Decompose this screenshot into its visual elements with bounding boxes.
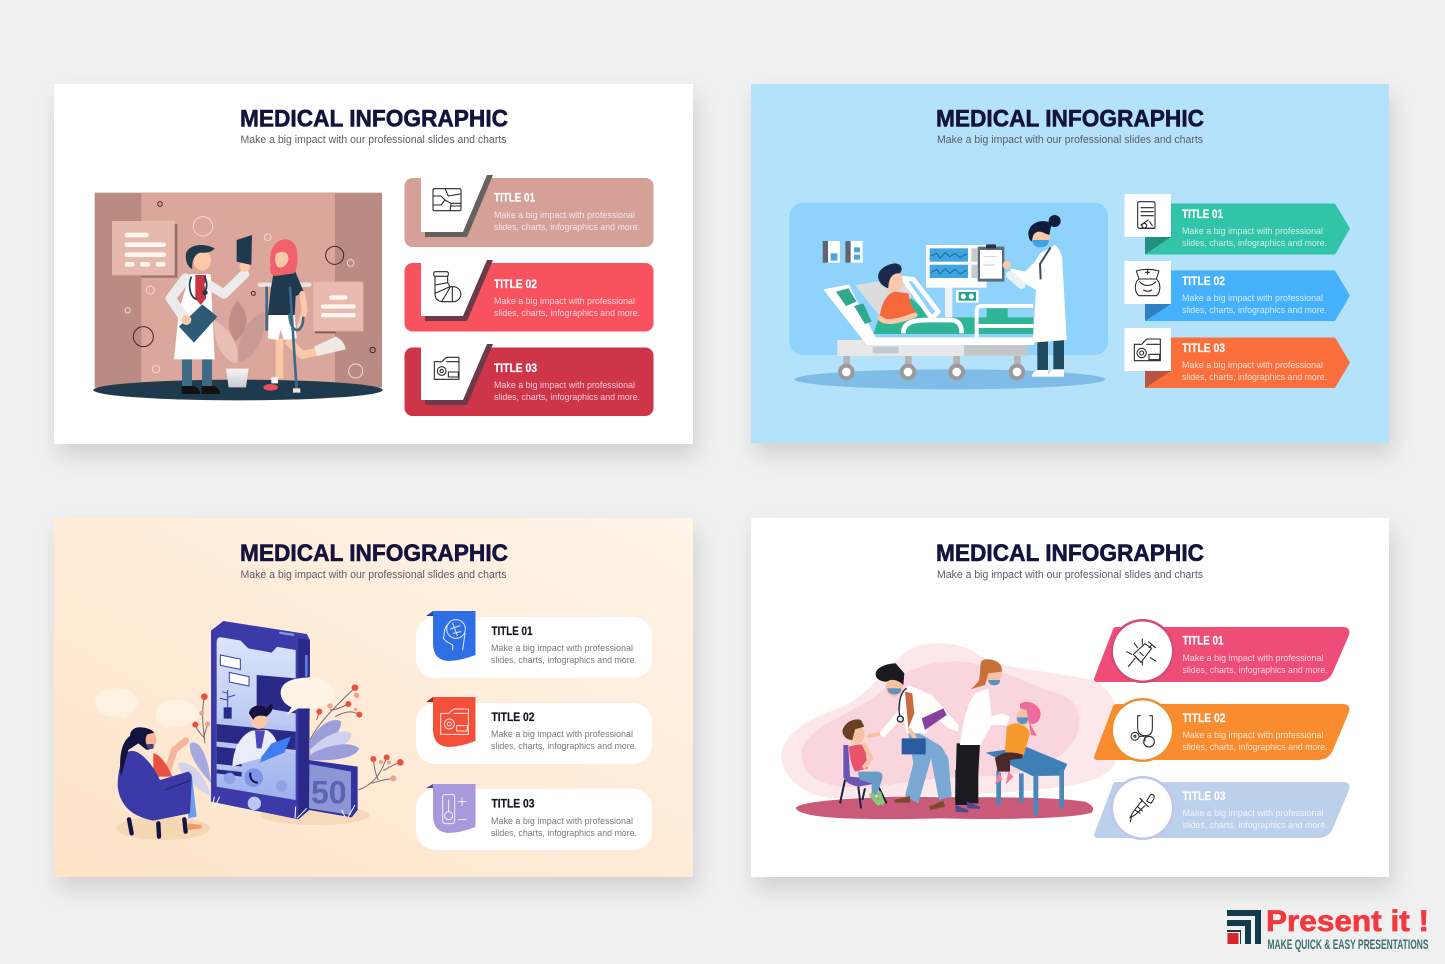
icon: x-ray map xyxy=(433,189,461,211)
card text xyxy=(1182,711,1328,753)
card text: TITLE 01 xyxy=(494,190,535,204)
icon ribbon: x-ray folder xyxy=(426,697,476,747)
card text: Make a big impact with professional xyxy=(1182,808,1324,819)
card: title 01 xyxy=(1094,619,1349,683)
icon: syringe xyxy=(1127,639,1156,667)
card: title 01 xyxy=(404,175,654,247)
illustration: patient in hospital bed with doctor xyxy=(789,203,1108,389)
icon: x-ray folder xyxy=(1134,339,1160,361)
card text: slides, charts, infographics and more. xyxy=(491,655,637,666)
card text: TITLE 02 xyxy=(1182,274,1225,288)
title: MEDICAL INFOGRAPHIC xyxy=(936,106,1204,132)
card text: slides, charts, infographics and more. xyxy=(1182,305,1327,316)
card text: Make a big impact with professional xyxy=(1182,293,1323,304)
icon ribbon: brain xyxy=(426,611,476,661)
panel: top-right slide xyxy=(751,84,1389,443)
card text xyxy=(491,710,637,752)
card text: TITLE 01 xyxy=(492,624,533,638)
panel: bottom-left slide xyxy=(54,518,693,877)
card: title 02 xyxy=(416,697,652,764)
icon: arm cast xyxy=(434,272,461,302)
icon: logo mark xyxy=(1227,910,1261,944)
card: title 03 xyxy=(1124,328,1350,388)
card text: Make a big impact with professional xyxy=(494,210,635,221)
card: title 01 xyxy=(1124,194,1350,254)
logo: Present it xyxy=(1227,905,1429,952)
illustration: telemedicine phone consultation: 50 xyxy=(311,774,347,810)
card text: slides, charts, infographics and more. xyxy=(491,828,637,839)
panel: bottom-right slide xyxy=(751,518,1389,877)
card text: TITLE 01 xyxy=(1182,207,1223,221)
card text: slides, charts, infographics and more. xyxy=(1182,665,1328,676)
card text: TITLE 01 xyxy=(1182,634,1224,648)
card text: slides, charts, infographics and more. xyxy=(1182,742,1328,753)
card text: Make a big impact with professional xyxy=(491,643,633,654)
icon: nurse xyxy=(1135,269,1160,296)
card text: TITLE 03 xyxy=(1182,341,1225,355)
card text: Make a big impact with professional xyxy=(1182,730,1324,741)
card text: slides, charts, infographics and more. xyxy=(494,222,640,233)
card text: TITLE 02 xyxy=(1182,711,1226,725)
card text xyxy=(1182,789,1328,831)
title: MEDICAL INFOGRAPHIC xyxy=(936,540,1204,567)
card text: Make a big impact with professional xyxy=(494,296,635,307)
panel: top-left slide xyxy=(54,84,693,444)
icon: x-ray folder xyxy=(434,357,459,379)
subtitle: Make a big impact with our professional slides and charts xyxy=(240,134,507,146)
card text xyxy=(494,361,640,403)
icon: dropper xyxy=(1130,794,1154,822)
card text: TITLE 02 xyxy=(492,710,535,724)
illustration: doctors examining children xyxy=(781,643,1119,819)
subtitle: Make a big impact with our professional slides and charts xyxy=(937,569,1203,581)
card text: TITLE 02 xyxy=(494,277,537,291)
card text xyxy=(491,624,637,666)
card text: TITLE 03 xyxy=(492,796,535,810)
illustration: telemedicine phone consultation xyxy=(95,621,404,840)
card: title 02 xyxy=(1094,698,1349,762)
card text: slides, charts, infographics and more. xyxy=(1182,372,1327,383)
card text: slides, charts, infographics and more. xyxy=(1182,820,1328,831)
card text xyxy=(494,190,640,233)
card: title 03 xyxy=(1094,776,1349,840)
card text xyxy=(1182,207,1327,249)
subtitle: Make a big impact with our professional slides and charts xyxy=(240,569,507,581)
card text: Make a big impact with professional xyxy=(494,380,635,391)
card text xyxy=(1182,634,1328,676)
card: title 02 xyxy=(1124,261,1350,321)
card text: Make a big impact with professional xyxy=(1182,360,1323,371)
card text: TITLE 03 xyxy=(1182,789,1226,803)
title: MEDICAL INFOGRAPHIC xyxy=(240,540,508,567)
illustration: doctor and patient on crutches xyxy=(93,193,383,400)
icon ribbon: thermometer xyxy=(426,784,476,833)
card: title 03 xyxy=(404,344,654,416)
card text: slides, charts, infographics and more. xyxy=(491,741,637,752)
card text xyxy=(1182,341,1327,383)
card text: Make a big impact with professional xyxy=(491,816,633,827)
logo wordmark: Present it ! xyxy=(1266,905,1429,938)
card text: slides, charts, infographics and more. xyxy=(494,392,640,403)
card text xyxy=(494,277,640,319)
subtitle: Make a big impact with our professional slides and charts xyxy=(937,134,1203,146)
icon: stethoscope xyxy=(1131,716,1154,747)
card text: Make a big impact with professional xyxy=(491,729,633,740)
card text xyxy=(1182,274,1327,316)
title: MEDICAL INFOGRAPHIC xyxy=(240,106,508,132)
card text: slides, charts, infographics and more. xyxy=(1182,238,1327,249)
card: title 03 xyxy=(416,784,652,850)
icon: medical document xyxy=(1138,202,1155,228)
card text: Make a big impact with professional xyxy=(1182,653,1324,664)
card: title 01 xyxy=(416,611,652,678)
card text: slides, charts, infographics and more. xyxy=(494,308,640,319)
card text xyxy=(491,796,637,839)
card text: TITLE 03 xyxy=(494,361,537,375)
card text: Make a big impact with professional xyxy=(1182,226,1323,237)
card: title 02 xyxy=(404,260,654,332)
